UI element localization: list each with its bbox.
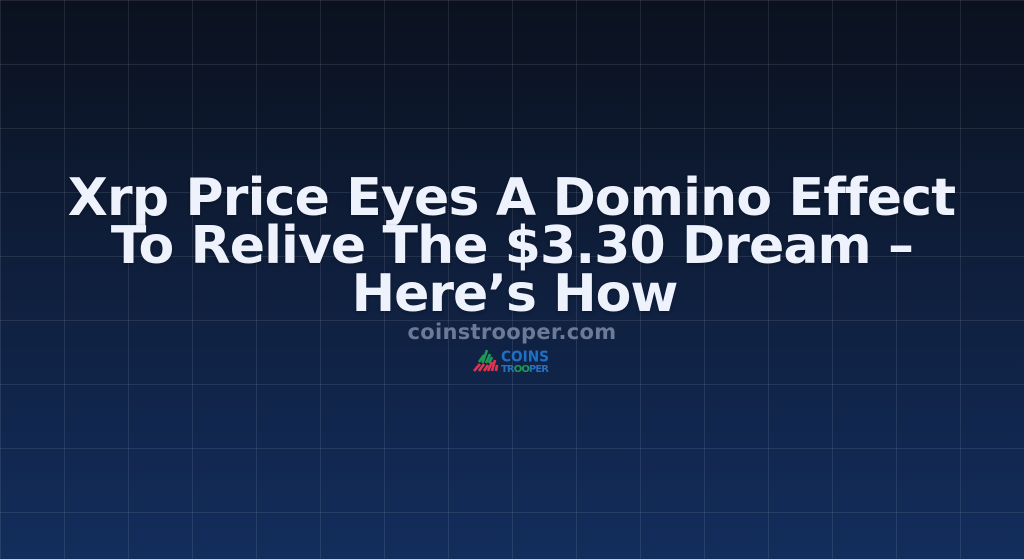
website caption: coinstrooper.com: [408, 320, 616, 344]
title: To Relive The $3.30 Dream –: [111, 216, 913, 276]
title: [68, 168, 955, 324]
title: Xrp Price Eyes A Domino Effect: [68, 168, 955, 228]
logo: coins trooper: [473, 348, 549, 374]
title: Here’s How: [352, 264, 677, 324]
icon: green rising stripes: [479, 350, 492, 363]
icon: red chart stripes: [474, 360, 497, 371]
